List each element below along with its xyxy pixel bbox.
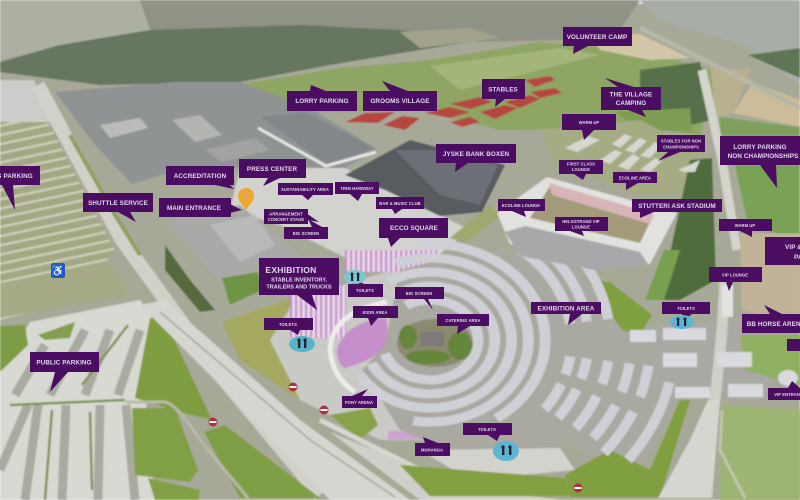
label: shuttle service: SHUTTLE SERVICE [88,200,148,207]
label: lorry parking non championships [720,136,800,188]
label: lorry parking: LORRY PARKING [295,98,349,105]
label: bar and music club [376,197,424,214]
label: vip parking, clipped at left edge [0,166,40,210]
label: ecco square [379,218,448,247]
label: exhibition: TRAILERS AND TRUCKS [266,284,332,290]
label: pony arena: PONY ARENA [345,400,373,405]
label: main entrance [159,198,242,217]
label: stables [482,79,525,107]
label: lorry parking [287,85,357,111]
label: toilets west: TOILETS [279,322,297,327]
label: stables for non championships: STABLES FOR NON [661,138,701,144]
label: toilets east: TOILETS [677,306,695,311]
label: accreditation [166,166,234,189]
label: toilets west [264,318,313,335]
label: stutteri ask stadium: STUTTERI ASK STADIUM [638,203,716,210]
label: public parking: PUBLIC PARKING [36,360,92,366]
label: helgstrand vip lounge [555,217,608,236]
label: esdr area: ESDR AREA [363,310,387,315]
stadium [497,177,677,270]
label: toilets south [463,423,512,441]
label: toilets south: TOILETS [478,427,496,432]
label: arrangement concert stage: CONCERT STAGE [268,217,304,222]
label: warm up east: WARM UP [735,223,755,228]
label: stutteri ask stadium [632,199,722,218]
label: helgstrand vip lounge: HELGSTRAND VIP [562,219,600,224]
label: stables: STABLES [488,86,518,94]
label: esdr area [353,306,398,326]
icon: disabled parking sign: ♿ [51,264,65,278]
label: the village camping: CAMPING [616,100,646,107]
label: vip lounge [709,267,762,291]
label: press center: PRESS CENTER [247,166,297,173]
label: volunteer camp [563,27,632,54]
label: stables for non championships: CHAMPIONSHIPS [663,144,699,150]
label: warm up: WARM UP [579,120,599,125]
label: ecco square: ECCO SQUARE [390,225,438,232]
label: volunteer camp: VOLUNTEER CAMP [567,34,627,41]
icon: toilets south [493,441,519,461]
label: first class lounge: LOUNGE [572,167,590,172]
label: vip lounge: VIP LOUNGE [722,272,748,278]
label: public parking [30,352,99,392]
icon: toilets north [344,270,366,284]
label: press center [239,159,306,186]
label: bar and music club: BAR & MUSIC CLUB [379,201,421,206]
icon: main entrance pin [238,188,254,210]
label: warm up [562,114,616,140]
label: shuttle service [83,193,153,222]
label: jyske bank boxen [436,144,516,172]
label: exhibition area: EXHIBITION AREA [538,306,595,312]
label: exhibition: EXHIBITION [265,265,317,275]
label: big screen west: BIG SCREEN [293,231,319,236]
label: exhibition [259,258,339,310]
exhibition hall pink zones [290,250,464,440]
icon: toilets west [289,336,315,352]
label: arrangement concert stage [264,209,319,224]
label: exhibition: STABLE INVENTORY, [271,278,327,284]
icon: no entry signs [208,382,582,492]
label: ecoline lounge [498,199,545,217]
label: helgstrand vip lounge: LOUNGE [572,224,590,230]
exhibition area tents [304,233,800,500]
label: catering area: CATERING AREA [446,318,480,323]
label: toilets north [348,278,383,297]
label: warm up east [719,219,772,237]
label: exhibition area [531,302,601,325]
label: muhanga: MUHANGA [421,448,443,452]
label: sustainability area [278,183,333,200]
label: vip and east park [765,237,800,265]
label: big screen west [284,219,328,239]
label: the village camping: THE VILLAGE [610,92,652,98]
label: vip entrance [768,381,800,400]
label: the village camping [601,78,661,117]
label: catering area [437,314,489,334]
label: trim hardway: TRIM HARDWAY [340,186,374,191]
label: sustainability area: SUSTAINABILITY AREA [281,187,329,192]
label: grooms village [363,81,437,111]
label: pony arena [342,389,377,408]
label: toilets north: TOILETS [356,288,374,293]
label: main entrance: MAIN ENTRANCE [167,205,221,212]
label: grooms village: GROOMS VILLAGE [370,98,430,105]
icon: toilets east [670,315,694,329]
label: trim hardway [335,182,379,201]
label: first class lounge [559,160,603,180]
label: ecoline area [613,172,657,190]
label: toilets east [662,302,710,320]
label: arrangement concert stage: ARRANGEMENT [269,212,303,216]
label: lorry parking non championships: NON CHAMPIONSHIPS [728,153,798,160]
label: jyske bank boxen: JYSKE BANK BOXEN [443,151,510,158]
label: ecoline area: ECOLINE AREA [619,176,651,180]
label: arena side tag [787,339,800,351]
label: ecoline lounge: ECOLINE LOUNGE [502,203,540,208]
label: lorry parking non championships: LORRY PARKING [733,144,787,151]
label: big screen centre [395,287,444,310]
label: stables for non championships [657,135,705,161]
label: bb horse arena [742,305,800,333]
label: first class lounge: FIRST CLASS [567,162,595,166]
label: muhanga [415,437,450,456]
label: accreditation: ACCREDITATION [174,173,227,180]
label: big screen centre: BIG SCREEN [406,291,432,296]
